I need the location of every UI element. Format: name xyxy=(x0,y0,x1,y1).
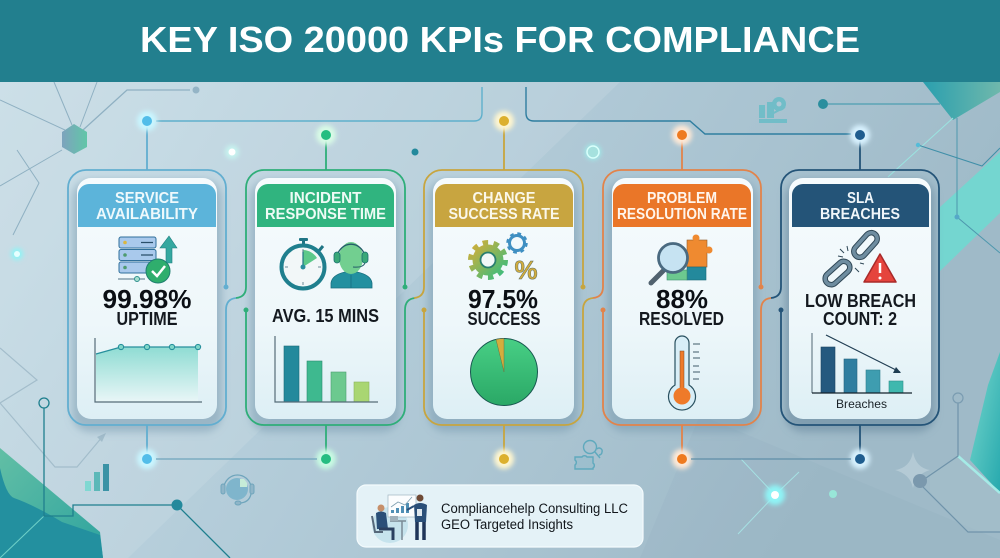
bottom node xyxy=(137,449,157,469)
icon: hexagon xyxy=(62,124,87,154)
bottom node xyxy=(316,449,336,469)
bottom connector lines xyxy=(156,458,851,460)
top node xyxy=(137,111,157,131)
sparkle lights xyxy=(738,459,837,534)
heading: INCIDENT xyxy=(290,190,362,207)
bottom left decoration xyxy=(0,348,230,558)
bottom node xyxy=(672,449,692,469)
heading: PROBLEM xyxy=(647,190,717,207)
icon: broken chain xyxy=(823,230,880,287)
panel: incident response time xyxy=(236,125,415,469)
panel frame xyxy=(771,170,939,432)
heading xyxy=(265,190,386,223)
area chart xyxy=(95,338,202,402)
illustration: presenter and analyst xyxy=(372,494,427,543)
connector stems xyxy=(681,140,683,455)
top node xyxy=(672,125,692,145)
thermometer xyxy=(669,336,700,410)
icon: magnifier and puzzle xyxy=(651,234,712,283)
bottom right decoration xyxy=(895,352,1000,532)
header xyxy=(792,184,929,227)
heading: CHANGE xyxy=(472,190,536,207)
kpi value: 99.98% xyxy=(102,284,192,314)
kpi value: AVG. 15 MINS xyxy=(272,306,379,326)
panel: service availability xyxy=(68,111,236,469)
panel: sla breaches xyxy=(771,125,939,469)
heading: SERVICE xyxy=(115,190,179,207)
chart label: Breaches xyxy=(836,397,887,411)
panel frame xyxy=(593,170,771,432)
panel frame xyxy=(236,170,415,432)
panel frame xyxy=(414,170,593,432)
icon: faint chart and gear xyxy=(759,97,787,123)
kpi value: 97.5% xyxy=(468,284,538,314)
heading: AVAILABILITY xyxy=(96,206,199,223)
heading: RESOLUTION RATE xyxy=(617,206,747,223)
icon: warning triangle xyxy=(864,254,896,282)
card xyxy=(255,178,396,419)
card xyxy=(77,178,217,419)
header xyxy=(78,184,216,227)
icon: stopwatch xyxy=(282,238,324,288)
footer badge xyxy=(357,485,643,547)
icon: faint puzzle and magnifier xyxy=(575,440,602,469)
panel: problem resolution rate xyxy=(593,125,771,469)
top node xyxy=(316,125,336,145)
top connector lines xyxy=(156,87,851,134)
top right decoration xyxy=(818,82,1000,272)
title bar xyxy=(0,0,1000,82)
heading: BREACHES xyxy=(820,206,900,223)
heading xyxy=(617,190,747,223)
card xyxy=(612,178,753,419)
panel: change success rate xyxy=(414,111,593,469)
decorative network: top left xyxy=(0,82,200,235)
heading: RESPONSE TIME xyxy=(265,206,386,223)
kpi label: SUCCESS xyxy=(468,309,540,329)
card xyxy=(789,178,931,419)
heading: SLA xyxy=(847,190,874,207)
header xyxy=(435,184,573,227)
small glowing dots xyxy=(225,144,601,160)
pie chart xyxy=(470,338,538,406)
icon: faint headset xyxy=(221,475,254,505)
bottom node xyxy=(850,449,870,469)
heading xyxy=(820,190,900,223)
icon: support agent xyxy=(331,242,372,288)
heading: SUCCESS RATE xyxy=(448,206,560,223)
tagline: GEO Targeted Insights xyxy=(441,517,573,532)
bar chart with trend arrow xyxy=(812,333,912,393)
icon: gears and percent: % xyxy=(514,255,538,285)
header xyxy=(257,184,394,227)
header xyxy=(613,184,751,227)
bar chart xyxy=(275,336,378,402)
icon: server with check xyxy=(118,236,177,283)
company name: Compliancehelp Consulting LLC xyxy=(441,501,628,516)
bottom node xyxy=(494,449,514,469)
connector stems xyxy=(859,140,861,455)
connector stems xyxy=(146,126,148,455)
title: KEY ISO 20000 KPIs FOR COMPLIANCE xyxy=(140,19,860,60)
kpi value xyxy=(805,291,916,329)
left glow dot xyxy=(11,248,23,260)
icon: small bars xyxy=(85,464,109,491)
kpi value: 88% xyxy=(656,284,708,314)
kpi label: RESOLVED xyxy=(639,309,724,329)
kpi label: UPTIME xyxy=(116,309,178,329)
icon: gears and percent xyxy=(471,234,538,285)
kpi value: COUNT: 2 xyxy=(823,309,897,329)
panel frame xyxy=(68,170,236,432)
connector stems xyxy=(503,126,505,455)
kpi value: LOW BREACH xyxy=(805,291,916,311)
heading xyxy=(448,190,560,223)
heading xyxy=(96,190,199,223)
card xyxy=(433,178,574,419)
connector stems xyxy=(325,140,327,455)
top node xyxy=(850,125,870,145)
top node xyxy=(494,111,514,131)
